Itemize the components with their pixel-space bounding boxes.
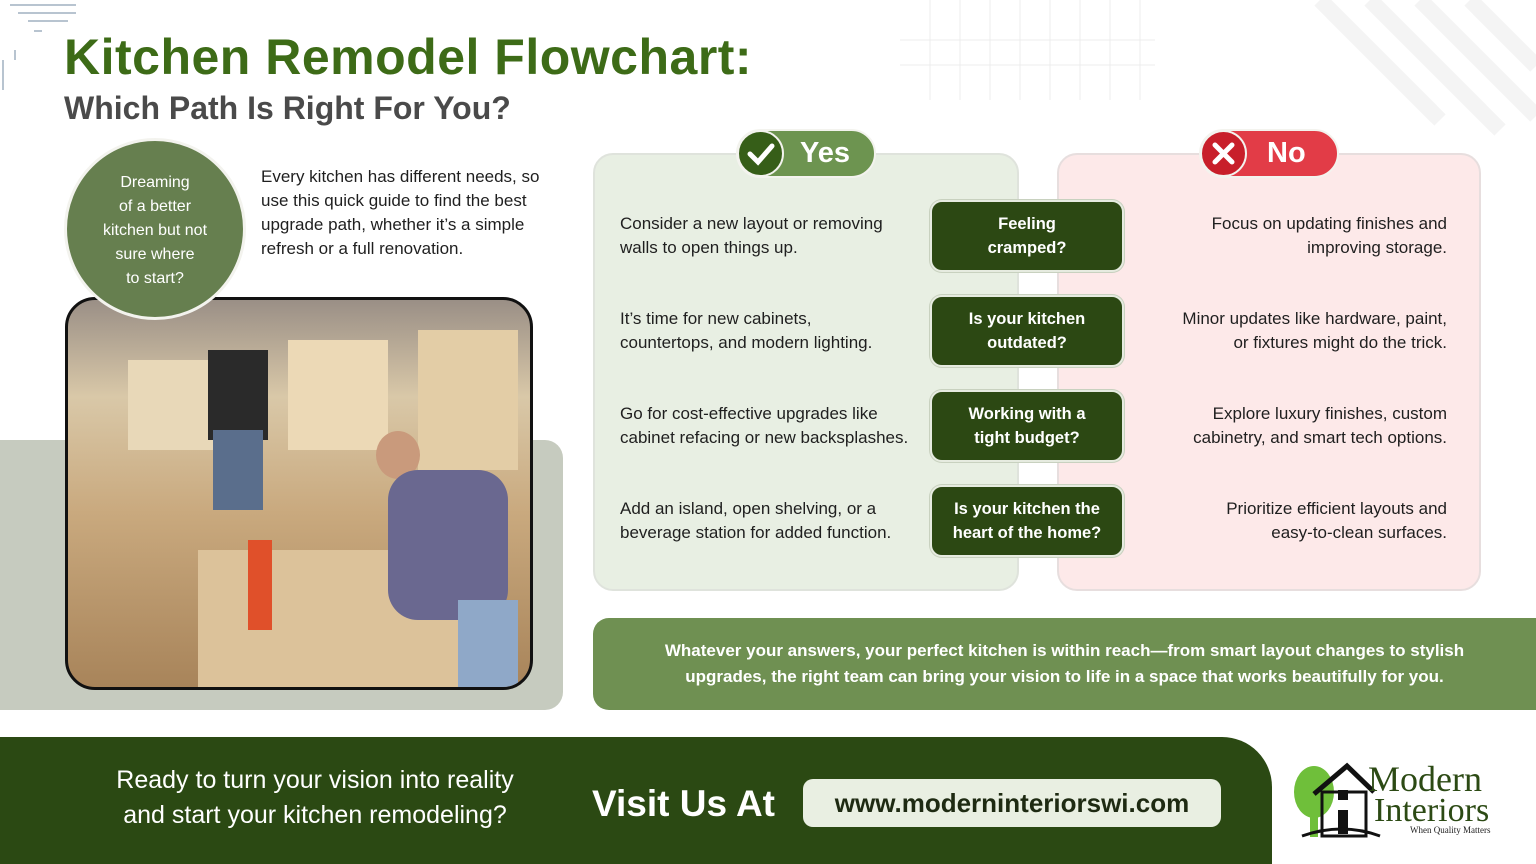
- decorative dots: [2, 4, 76, 90]
- question 2: outdated?: [987, 334, 1067, 352]
- subtitle: Which Path Is Right For You?: [64, 90, 511, 126]
- circle: dreaming: to start?: [126, 270, 184, 287]
- yes answer 3: [620, 404, 908, 447]
- decorative grid: [900, 0, 1155, 100]
- question 1: [930, 200, 1124, 272]
- callout: summary: upgrades, the right team can bring your vision to life in a space that works beautifully for you.: [685, 667, 1444, 686]
- footer band: [0, 737, 1272, 864]
- question 1: cramped?: [988, 239, 1066, 257]
- yes answer 4: beverage station for added function.: [620, 523, 891, 542]
- footer cta text: [116, 766, 514, 829]
- decorative stripes: [1314, 0, 1536, 136]
- no answer 4: [1226, 499, 1447, 542]
- no answer 4: Prioritize efficient layouts and: [1226, 499, 1447, 518]
- yes answer 3: Go for cost-effective upgrades like: [620, 404, 878, 423]
- intro text: [261, 167, 539, 258]
- intro text: upgrade path, whether it’s a simple: [261, 215, 524, 234]
- question 3: [930, 390, 1124, 462]
- circle: dreaming: of a better: [119, 198, 191, 215]
- logo: When Quality Matters: [1410, 825, 1490, 835]
- yes answer 1: Consider a new layout or removing: [620, 214, 883, 233]
- visit us heading: Visit Us At: [592, 783, 775, 824]
- question 2: Is your kitchen: [969, 310, 1085, 328]
- no answer 2: Minor updates like hardware, paint,: [1182, 309, 1447, 328]
- intro text: use this quick guide to find the best: [261, 191, 527, 210]
- title: Kitchen Remodel Flowchart:: [64, 29, 752, 85]
- url pill: [803, 779, 1221, 827]
- badge: no: [1199, 129, 1339, 178]
- callout: summary: Whatever your answers, your perfect kitchen is within reach—from smart layout changes to stylish: [665, 641, 1464, 660]
- yes answer 2: It’s time for new cabinets,: [620, 309, 812, 328]
- no answer 2: or fixtures might do the trick.: [1233, 333, 1447, 352]
- panel: yes: [593, 153, 1019, 591]
- logo: Interiors: [1374, 792, 1489, 829]
- question 1: Feeling: [998, 215, 1056, 233]
- no answer 2: [1182, 309, 1447, 352]
- circle: dreaming: [64, 138, 246, 320]
- no answer 3: Explore luxury finishes, custom: [1213, 404, 1447, 423]
- question 4: heart of the home?: [953, 524, 1101, 542]
- callout: summary: [593, 618, 1536, 710]
- no answer 3: [1193, 404, 1447, 447]
- no answer 1: [1212, 214, 1447, 257]
- yes answer 2: [620, 309, 872, 352]
- question 4: Is your kitchen the: [954, 500, 1100, 518]
- question 3: Working with a: [968, 405, 1086, 423]
- intro text: refresh or a full renovation.: [261, 239, 463, 258]
- question 2: [930, 295, 1124, 367]
- circle: dreaming: kitchen but not: [103, 222, 207, 239]
- no answer 4: easy-to-clean surfaces.: [1271, 523, 1447, 542]
- question 3: tight budget?: [974, 429, 1080, 447]
- yes answer 4: [620, 499, 891, 542]
- no answer 3: cabinetry, and smart tech options.: [1193, 428, 1447, 447]
- footer cta text: Ready to turn your vision into reality: [116, 766, 514, 794]
- badge: yes: Yes: [800, 137, 850, 169]
- panel: no: [1057, 153, 1481, 591]
- url pill: www.moderninteriorswi.com: [835, 788, 1189, 818]
- yes answer 1: walls to open things up.: [620, 238, 798, 257]
- gray backdrop block: [0, 440, 563, 710]
- no answer 1: Focus on updating finishes and: [1212, 214, 1447, 233]
- circle: dreaming: sure where: [115, 246, 195, 263]
- circle: dreaming: Dreaming: [120, 174, 190, 191]
- question 4: [930, 485, 1124, 557]
- footer cta text: and start your kitchen remodeling?: [123, 801, 507, 829]
- no answer 1: improving storage.: [1307, 238, 1447, 257]
- photo: kitchen remodel: [65, 297, 533, 690]
- logo: [1294, 759, 1490, 838]
- yes answer 2: countertops, and modern lighting.: [620, 333, 872, 352]
- yes answer 3: cabinet refacing or new backsplashes.: [620, 428, 908, 447]
- badge: no: No: [1267, 137, 1306, 169]
- badge: yes: [736, 129, 876, 178]
- logo: Modern: [1368, 759, 1482, 799]
- yes answer 4: Add an island, open shelving, or a: [620, 499, 876, 518]
- yes answer 1: [620, 214, 883, 257]
- intro text: Every kitchen has different needs, so: [261, 167, 539, 186]
